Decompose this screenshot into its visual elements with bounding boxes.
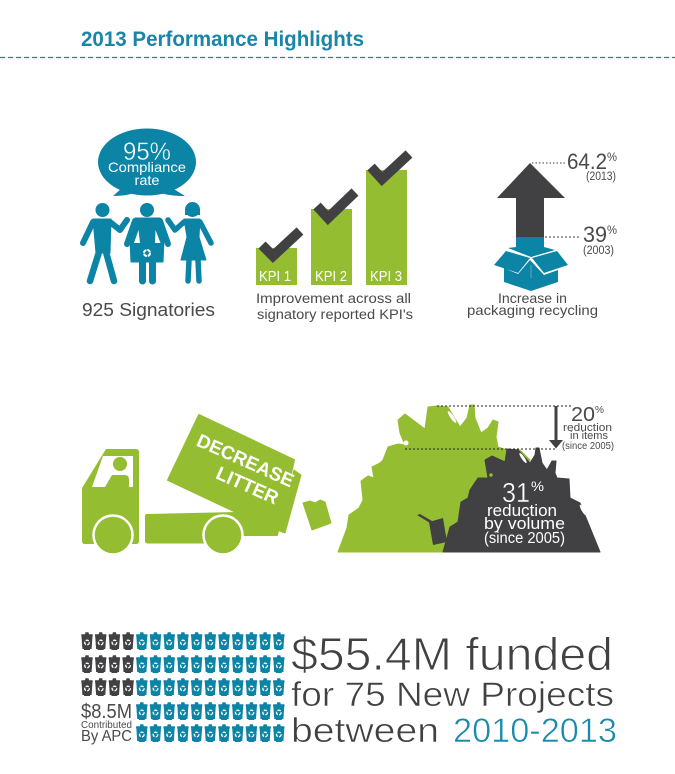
panel: packaging recycling — [467, 149, 617, 318]
stat: 20 percent reduction in items: (since 2005) — [562, 441, 614, 452]
panel: signatories — [82, 128, 215, 320]
stat: 64.2 percent — [567, 149, 617, 183]
caption: packaging recycling: Increase in — [498, 290, 567, 306]
bar: KPI 2 — [311, 192, 355, 285]
icon: open box — [494, 247, 568, 291]
arrow: recycling increase — [497, 163, 565, 249]
speech bubble: compliance rate — [98, 128, 196, 196]
bar: KPI 2: KPI 2 — [315, 268, 347, 285]
bar: KPI 1 — [256, 231, 300, 285]
panel: litter pile — [338, 404, 614, 552]
caption: packaging recycling: packaging recycling — [467, 302, 598, 318]
stat: 31 percent reduction by volume: reduction — [487, 502, 557, 520]
label: 925 signatories: 925 Signatories — [82, 299, 215, 320]
label: APC contribution: By APC — [81, 728, 132, 745]
caption: KPI improvement: Improvement across all — [256, 291, 411, 306]
stat: 39 percent: (2003) — [583, 245, 614, 257]
stat: 20 percent reduction in items: reduction — [563, 422, 612, 434]
stat: 31 percent reduction by volume — [484, 477, 565, 547]
stat: 20 percent reduction in items — [562, 404, 614, 452]
bar: KPI 3 — [366, 154, 409, 285]
dark litter pile — [443, 448, 600, 552]
text: decrease litter — [184, 431, 297, 512]
headline: funding total: $55.4M funded — [291, 628, 613, 680]
headline: funding total: for 75 New Projects — [291, 676, 614, 714]
headline: funding total — [291, 628, 617, 750]
stat: 20 percent reduction in items: in items — [570, 430, 608, 442]
caption: KPI improvement: signatory reported KPI's — [257, 307, 413, 322]
text: decrease litter: LITTER — [213, 463, 282, 509]
title: 2013 Performance Highlights — [81, 28, 364, 51]
pictogram: 75 recycling bins — [81, 632, 285, 742]
panel: decrease litter truck — [82, 415, 331, 554]
stat: 20 percent reduction in items: % — [595, 405, 604, 416]
stat: 39 percent — [583, 222, 617, 257]
leader line: 2003 — [545, 236, 580, 238]
leader line: 2013 — [532, 162, 566, 164]
stat: 39 percent: 39 — [583, 222, 607, 247]
stat: 20 percent reduction in items: 20 — [571, 404, 595, 426]
stat: 64.2 percent: 64.2 — [567, 149, 607, 174]
icon: woman — [168, 202, 211, 281]
stat: 64.2 percent: (2013) — [586, 171, 616, 183]
headline: funding total: between — [291, 712, 439, 750]
icon: falling jug — [303, 500, 331, 530]
icon: truck — [82, 415, 301, 554]
icon: man — [83, 203, 127, 281]
icon: woman with recycling apron — [127, 203, 168, 281]
leader lines — [405, 406, 572, 449]
stat: 64.2 percent: % — [607, 150, 617, 164]
speech bubble: compliance rate: 95% — [123, 138, 171, 166]
arrow: items reduction — [549, 406, 563, 448]
bar: KPI 1: KPI 1 — [259, 268, 291, 285]
panel: KPI bars — [256, 154, 415, 322]
green litter pile — [338, 405, 530, 552]
speech bubble: compliance rate: rate — [134, 172, 160, 188]
label: APC contribution — [81, 701, 132, 745]
label: APC contribution: $8.5M — [81, 701, 132, 723]
panel: funding — [81, 628, 617, 750]
bar: KPI 3: KPI 3 — [370, 268, 402, 285]
speech bubble: compliance rate: Compliance — [108, 159, 186, 175]
icon: tin can — [417, 514, 447, 545]
text: decrease litter: DECREASE — [193, 431, 297, 492]
stat: 31 percent reduction by volume: (since 2005) — [484, 530, 565, 547]
stat: 39 percent: % — [607, 223, 617, 237]
stat: 31 percent reduction by volume: by volume — [484, 515, 565, 533]
stat: 31 percent reduction by volume: % — [531, 478, 544, 494]
label: APC contribution: Contributed — [81, 720, 132, 731]
headline: funding total: 2010-2013 — [453, 712, 617, 750]
stat: 31 percent reduction by volume: 31 — [502, 477, 530, 508]
bins: other funding — [136, 632, 285, 742]
bins: APC contribution — [81, 632, 134, 696]
